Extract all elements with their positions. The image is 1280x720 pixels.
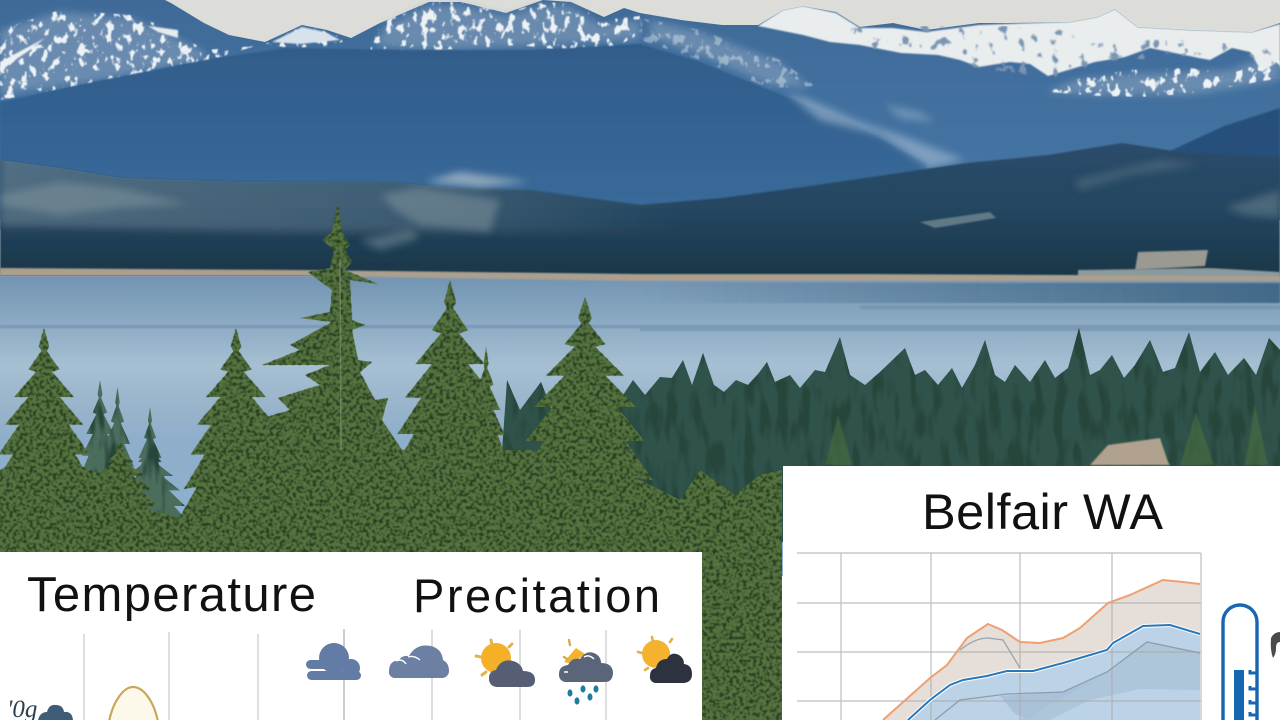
haze streaks bbox=[785, 92, 965, 168]
icon: thermometer bbox=[1223, 605, 1258, 720]
tree side small bbox=[455, 347, 517, 557]
sky bbox=[0, 0, 1280, 90]
right dark hill bbox=[1105, 108, 1280, 200]
tree B bbox=[171, 328, 301, 558]
snow: right massif bbox=[758, 6, 1280, 76]
icon: sun, cloud and rain bbox=[559, 640, 613, 705]
snow: lower right patches bbox=[1050, 60, 1280, 97]
icon: cloud 1 bbox=[306, 643, 361, 680]
far snow-capped mountain range bbox=[0, 0, 1280, 220]
panel grid lines bbox=[84, 629, 606, 720]
paler trees in distant forest bbox=[825, 405, 1268, 465]
snow haze left and centre bbox=[0, 5, 1280, 95]
gray series lines bbox=[960, 638, 1020, 668]
water bbox=[0, 276, 1280, 576]
panel: temperature and precipitation bbox=[0, 552, 702, 720]
orange series line bbox=[883, 580, 1200, 720]
rain drops bbox=[568, 685, 598, 705]
snow: left peak bbox=[0, 10, 255, 100]
tree trunk highlight bbox=[340, 260, 341, 450]
orange band area bbox=[883, 580, 1200, 720]
ground foliage bbox=[0, 450, 782, 720]
lighter left slope bbox=[0, 150, 1280, 250]
icon: sun with dark cloud bbox=[638, 637, 692, 683]
mid-distance trees left bbox=[70, 380, 200, 577]
icon: sun behind cloud bbox=[476, 640, 535, 687]
blue area bbox=[908, 625, 1200, 720]
icon: cloud 2 bbox=[389, 645, 449, 678]
tree C tall bbox=[200, 203, 440, 560]
tree small left bbox=[65, 440, 175, 560]
heading: Belfair WA: Belfair WA bbox=[922, 483, 1163, 540]
front blue mountain bbox=[0, 44, 965, 230]
chart grid bbox=[797, 553, 1201, 720]
pale mist above ridge bbox=[425, 172, 530, 187]
distant conifer forest bbox=[500, 328, 1280, 560]
mid forest hills bbox=[0, 143, 1280, 285]
tree E bbox=[500, 297, 670, 559]
panel: Belfair WA chart bbox=[783, 466, 1280, 720]
pale clearings bbox=[0, 160, 1280, 250]
shoreline bbox=[0, 268, 1280, 281]
shoreline houses in forest bbox=[1090, 438, 1170, 465]
icon: dark sketch fragment bbox=[1271, 632, 1280, 658]
heading: Temperature: Temperature bbox=[27, 568, 316, 622]
tree A bbox=[0, 328, 109, 558]
darker blue band bbox=[1020, 642, 1200, 720]
area chart bbox=[797, 553, 1201, 720]
water ripples bbox=[0, 306, 1280, 331]
icon: scribble with cloud bbox=[7, 696, 73, 720]
tree D bbox=[375, 280, 525, 560]
foreground conifers bbox=[0, 203, 782, 720]
blue series line bbox=[908, 625, 1200, 720]
icon: egg-shaped temperature dome bbox=[109, 687, 158, 720]
heading: Precitation: Precitation bbox=[413, 569, 660, 622]
snow: centre peaks bbox=[265, 26, 348, 48]
